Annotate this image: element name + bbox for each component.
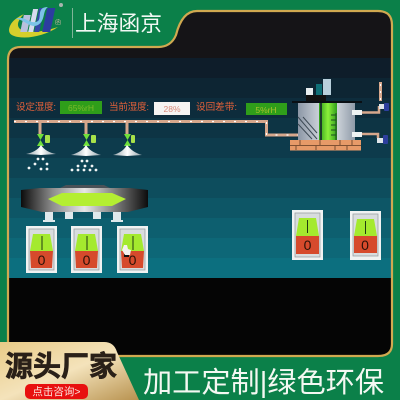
return difference label: 设回差带: bbox=[196, 101, 237, 113]
logo bbox=[9, 3, 63, 38]
humidity setting value: 65%rH bbox=[68, 103, 94, 113]
switch 3 bbox=[117, 226, 148, 273]
return difference value bbox=[246, 103, 287, 115]
gold badge bbox=[0, 342, 139, 400]
switch 5 bbox=[350, 211, 381, 260]
current humidity value bbox=[154, 102, 190, 115]
logo seal marks: 函 bbox=[55, 18, 61, 26]
consult button: 点击咨询> bbox=[32, 385, 81, 398]
hexagon indicator bbox=[48, 193, 126, 206]
spray nozzle 2 bbox=[71, 123, 101, 156]
return difference value: 5%rH bbox=[255, 105, 277, 115]
current humidity value: 28% bbox=[163, 104, 181, 114]
water droplets 1 bbox=[28, 158, 48, 170]
fan unit bbox=[21, 185, 148, 222]
switch 2 bbox=[71, 226, 102, 273]
current humidity label: 当前湿度: bbox=[109, 101, 149, 113]
switch 3: 0 bbox=[129, 252, 137, 268]
company name: 上海函京 bbox=[75, 12, 162, 36]
water droplets 2 bbox=[71, 160, 97, 171]
chimneys bbox=[306, 79, 331, 102]
switch 4 bbox=[292, 210, 323, 260]
icon: logo dot bbox=[59, 3, 63, 7]
spray nozzle 1 bbox=[26, 123, 56, 155]
spray nozzle 3 bbox=[113, 123, 142, 156]
humidity setting label: 设定湿度: bbox=[16, 101, 56, 113]
bottom slogan: 加工定制|绿色环保 bbox=[143, 367, 384, 399]
badge heading: 源头厂家 bbox=[5, 351, 117, 383]
icon: top valve bbox=[379, 103, 389, 111]
icon: logo letters bbox=[20, 8, 55, 32]
icon: logo wave bbox=[16, 7, 48, 26]
fan feet bbox=[43, 212, 123, 222]
switch 1: 0 bbox=[38, 252, 46, 268]
icon: hand cursor bbox=[122, 245, 131, 257]
main pipe bbox=[14, 122, 298, 135]
switch 2: 0 bbox=[83, 252, 91, 268]
icon: logo swoosh bbox=[9, 14, 58, 38]
icon: bottom valve bbox=[377, 135, 388, 144]
right pipes and valves bbox=[352, 82, 389, 144]
humidifier tank bbox=[290, 79, 362, 150]
divider bbox=[72, 8, 73, 38]
switch 4: 0 bbox=[304, 237, 312, 253]
switch 1 bbox=[26, 226, 57, 273]
humidity setting value bbox=[60, 101, 102, 114]
bricks bbox=[290, 140, 361, 150]
switch 5: 0 bbox=[361, 237, 369, 253]
